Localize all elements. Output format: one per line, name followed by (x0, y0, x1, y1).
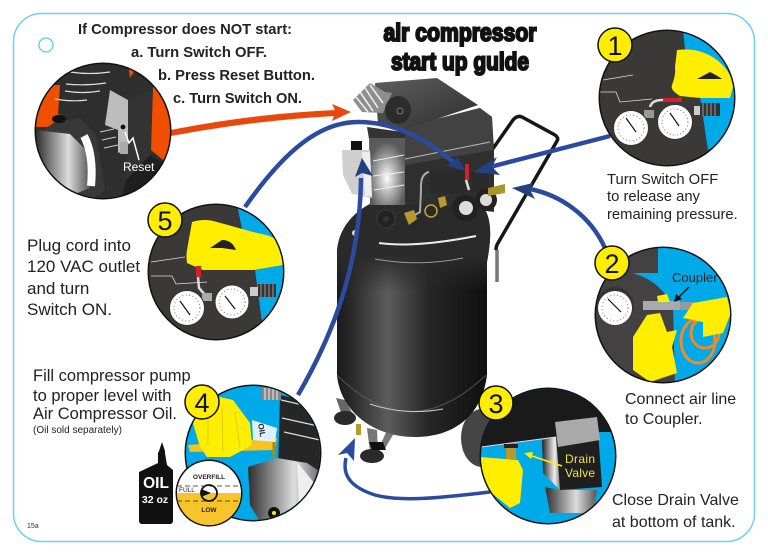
step 4 text: Air Compressor Oil. (33, 405, 177, 423)
binder hole (39, 38, 53, 52)
step 3 text: at bottom of tank. (612, 514, 736, 531)
oil level gauge (175, 460, 245, 529)
step 3 circle (480, 388, 620, 528)
badge 3 (479, 386, 513, 420)
badge 4: 4 (194, 388, 210, 418)
drain valve label: Drain (565, 452, 595, 466)
oil level gauge: FULL (179, 487, 195, 494)
hose from step 3 to drain valve (338, 438, 490, 499)
legs (336, 398, 355, 418)
badge 5: 5 (157, 206, 173, 236)
step 4 text: to proper level with (33, 387, 172, 405)
step 4 text: Fill compressor pump (33, 367, 191, 385)
wheel (461, 409, 503, 467)
title: air compressor (384, 19, 537, 47)
step 2 text: Connect air line (625, 391, 736, 408)
page code: 15a (27, 523, 39, 530)
handle (492, 116, 558, 250)
crankcase (342, 150, 372, 198)
badge 2: 2 (604, 249, 620, 279)
drain valve label (565, 452, 595, 480)
step 2 text: to Coupler. (625, 411, 702, 428)
oil note: (Oil sold separately) (33, 425, 122, 436)
orange arrow (171, 104, 351, 136)
pressure switch and gauges (430, 170, 466, 194)
step 4 circle (184, 384, 325, 525)
step 5 text: and turn (27, 279, 89, 298)
step 4 circle: OIL (256, 423, 267, 438)
badge 4 (185, 385, 219, 419)
compressor illustration (334, 78, 558, 467)
troubleshooting text: a. Turn Switch OFF. (131, 44, 267, 61)
troubleshooting text: If Compressor does NOT start: (78, 21, 292, 38)
oil bottle: 32 oz (142, 494, 168, 506)
drain valve label: Valve (565, 466, 595, 480)
hose from step 4 to pump (298, 158, 373, 395)
step 1 text: Turn Switch OFF (607, 172, 718, 188)
reset label: Reset (123, 160, 155, 174)
badge 1: 1 (607, 31, 623, 61)
hose from step 2 to coupler (512, 183, 605, 248)
badge 2 (595, 246, 629, 280)
troubleshooting text: c. Turn Switch ON. (173, 90, 302, 107)
step 2 circle (594, 246, 735, 385)
step 5 text: 120 VAC outlet (27, 257, 140, 276)
step 1 circle (598, 30, 740, 166)
step 5 circle (148, 204, 290, 342)
hose from step 1 to switch (473, 136, 610, 175)
title (384, 19, 537, 76)
pump head fins (353, 83, 392, 113)
step 5 text: Plug cord into (27, 236, 131, 255)
oil bottle (139, 442, 173, 524)
coupler label: Coupler (672, 270, 718, 285)
step 5 text: Switch ON. (27, 300, 112, 319)
oil bottle: OIL (143, 475, 169, 492)
badge 5 (148, 203, 182, 237)
oil level gauge: LOW (201, 507, 217, 514)
tank body (337, 198, 490, 437)
troubleshooting text (78, 21, 315, 107)
shroud (370, 108, 494, 212)
troubleshooting text: b. Press Reset Button. (158, 67, 315, 84)
cylinder (367, 127, 405, 150)
step 1 text: remaining pressure. (607, 207, 738, 223)
reset detail circle (34, 62, 172, 200)
step 3 text: Close Drain Valve (612, 492, 739, 509)
badge 1 (598, 28, 632, 62)
hose from step 5 to switch (245, 122, 466, 207)
step 1 text: to release any (607, 189, 701, 205)
oil level gauge: OVERFILL (193, 474, 225, 481)
badge 3: 3 (488, 389, 504, 419)
title: start up guide (391, 48, 529, 76)
